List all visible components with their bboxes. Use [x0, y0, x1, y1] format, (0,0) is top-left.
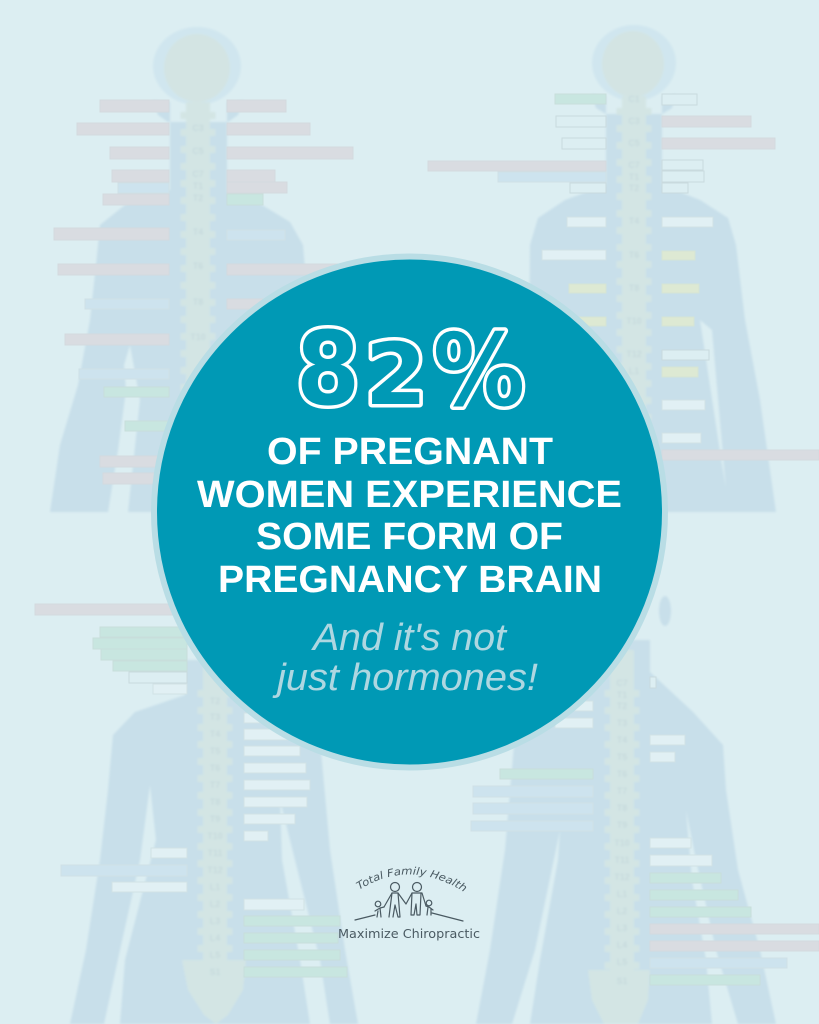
big outlined statistic: 82%: 2: [365, 325, 427, 425]
anatomy figure: bottom left spine chart: L3: [210, 916, 220, 926]
anatomy figure: bottom right spine chart: T3: [617, 718, 627, 728]
anatomy figure: bottom left spine chart: L5: [210, 950, 220, 960]
logo: Total Family Health, Maximize Chiropractic: Maximize Chiropractic: [338, 927, 480, 941]
anatomy figure: top left spine chart: T1: [193, 181, 203, 191]
subheading: And it's not: [311, 617, 507, 659]
anatomy figure: bottom right spine chart: T12: [614, 872, 630, 882]
subheading: just hormones!: [272, 657, 538, 699]
anatomy figure: bottom right spine chart: L4: [617, 940, 627, 950]
anatomy figure: top right spine chart: T1: [629, 172, 639, 182]
anatomy figure: bottom right spine chart: T7: [617, 786, 627, 796]
anatomy figure: bottom right spine chart: T9: [617, 820, 627, 830]
anatomy figure: bottom right spine chart: T2: [617, 701, 627, 711]
subheading: [272, 617, 538, 699]
big outlined statistic: 82%: 8: [296, 310, 360, 429]
anatomy figure: top left spine chart: T10: [190, 332, 206, 342]
anatomy figure: bottom left spine chart: T7: [210, 780, 220, 790]
anatomy figure: bottom left spine chart: T2: [210, 696, 220, 706]
anatomy figure: top left spine chart: T4: [193, 227, 203, 237]
anatomy figure: bottom left spine chart: T3: [210, 712, 220, 722]
anatomy figure: top right spine chart: C3: [628, 116, 640, 126]
anatomy figure: bottom right spine chart: C7: [616, 678, 628, 688]
anatomy figure: top left spine chart: C7: [192, 169, 204, 179]
anatomy figure: top right spine chart: T12: [626, 349, 642, 359]
anatomy figure: top right spine chart: C7: [628, 160, 640, 170]
anatomy figure: bottom left spine chart: T10: [207, 831, 223, 841]
anatomy figure: bottom right spine chart: T4: [617, 735, 627, 745]
bars: top left chart: [54, 100, 353, 484]
headline: [197, 431, 622, 601]
anatomy figure: bottom left spine chart: T6: [210, 763, 220, 773]
anatomy figure: bottom left spine chart: L2: [210, 899, 220, 909]
anatomy figure: bottom right spine chart: T8: [617, 803, 627, 813]
anatomy figure: top right spine chart: C5: [628, 138, 640, 148]
anatomy figure: bottom right spine chart: T6: [617, 769, 627, 779]
anatomy figure: bottom left spine chart: [70, 660, 358, 1024]
anatomy figure: top right spine chart: T10: [626, 316, 642, 326]
anatomy figure: top left spine chart: T8: [193, 297, 203, 307]
anatomy figure: bottom right spine chart: L3: [617, 923, 627, 933]
headline: SOME FORM OF: [256, 516, 563, 558]
icon: family holding hands: [355, 882, 463, 921]
anatomy figure: top left spine chart: C5: [192, 146, 204, 156]
big outlined statistic: 82%: [296, 310, 525, 429]
anatomy figure: bottom left spine chart: T9: [210, 814, 220, 824]
anatomy figure: bottom right spine chart: T11: [614, 855, 630, 865]
anatomy figure: top right spine chart: T4: [629, 216, 639, 226]
anatomy figure: bottom right spine chart: [476, 596, 776, 1024]
big outlined statistic: 82%: %: [433, 312, 525, 429]
anatomy figure: bottom left spine chart: T12: [207, 865, 223, 875]
anatomy figure: bottom right spine chart: T10: [614, 838, 630, 848]
bars: bottom right chart: [471, 677, 819, 985]
anatomy figure: bottom left spine chart: L4: [210, 933, 220, 943]
anatomy figure: bottom left spine chart: T5: [210, 746, 220, 756]
anatomy figure: top right spine chart: T6: [629, 250, 639, 260]
anatomy figure: bottom right spine chart: L1: [617, 889, 627, 899]
central teal circle with pale ring: [154, 256, 665, 768]
logo: Total Family Health, Maximize Chiropractic: [338, 866, 480, 941]
anatomy figure: top left spine chart: [50, 27, 330, 512]
anatomy figure: bottom right spine chart: L5: [617, 957, 627, 967]
headline: WOMEN EXPERIENCE: [197, 474, 622, 516]
anatomy figure: top left spine chart: C3: [192, 123, 204, 133]
anatomy figure: top right spine chart: T8: [629, 283, 639, 293]
anatomy figure: bottom right spine chart: T5: [617, 752, 627, 762]
headline: PREGNANCY BRAIN: [218, 559, 602, 601]
anatomy figure: bottom left spine chart: T11: [207, 848, 223, 858]
headline: OF PREGNANT: [267, 431, 553, 473]
anatomy figure: top right spine chart: L1: [629, 366, 639, 376]
anatomy figure: bottom right spine chart: S1: [616, 976, 628, 986]
anatomy figure: top left spine chart: T2: [193, 193, 203, 203]
anatomy figure: top left spine chart: T6: [193, 261, 203, 271]
anatomy figure: bottom left spine chart: L1: [210, 882, 220, 892]
anatomy figure: bottom right spine chart: T1: [617, 690, 627, 700]
anatomy figure: bottom left spine chart: T4: [210, 729, 220, 739]
anatomy figure: bottom right spine chart: L2: [617, 906, 627, 916]
anatomy figure: bottom left spine chart: T8: [210, 797, 220, 807]
anatomy figure: top right spine chart: C1: [628, 94, 640, 104]
bars: bottom left chart: [35, 604, 347, 977]
anatomy figure: bottom left spine chart: S1: [209, 967, 221, 977]
anatomy figure: top right spine chart: T2: [629, 183, 639, 193]
logo: Total Family Health, Maximize Chiropractic: Total Family Health: [356, 866, 466, 892]
anatomy figure: top right spine chart: [528, 25, 776, 512]
bars: top right chart: [428, 94, 819, 460]
